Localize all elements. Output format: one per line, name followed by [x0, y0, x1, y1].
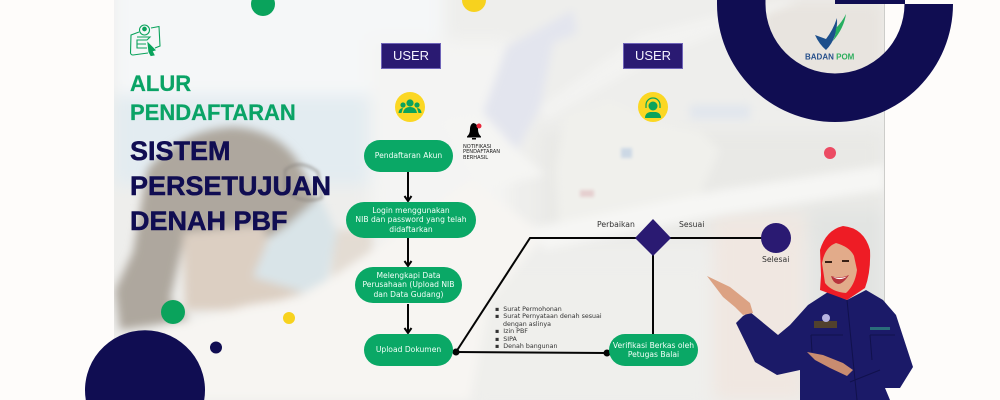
photo: background band	[330, 228, 374, 276]
heading: sistem persetujuan denah pbf: DENAH PBF	[130, 206, 288, 236]
notification text	[463, 144, 500, 160]
large navy ring	[717, 0, 953, 122]
document list: ▪ SIPA	[495, 336, 517, 343]
heading: alur pendaftaran	[130, 71, 296, 125]
document list: ▪ Izin PBF	[495, 328, 528, 335]
document list: dengan aslinya	[503, 321, 551, 328]
photo: mask	[253, 197, 337, 292]
step: melengkapi data: Melengkapi Data	[376, 271, 441, 280]
yellow small dot	[283, 312, 295, 324]
presenter upper hand	[707, 276, 753, 315]
step: verifikasi berkas	[609, 334, 698, 366]
photo: diagonal highlight	[766, 4, 781, 12]
step: login: Login menggunakan	[372, 206, 450, 215]
document list: ▪ Surat Permohonan	[495, 306, 562, 313]
presenter eyes and smile	[825, 260, 849, 263]
heading: sistem persetujuan denah pbf	[130, 136, 331, 236]
presenter uniform body and sleeves	[736, 290, 913, 400]
user label right: USER	[635, 48, 671, 63]
presenter chest logo	[870, 327, 890, 330]
step: login	[346, 202, 476, 238]
photo: hair	[115, 127, 320, 330]
photo: skin	[183, 225, 303, 310]
label sesuai: Sesuai	[679, 220, 704, 229]
navy small dot	[210, 342, 222, 354]
photo: glove	[485, 18, 572, 143]
heading: sistem persetujuan denah pbf: SISTEM	[130, 136, 231, 166]
photo: lab coat sleeve	[440, 113, 545, 190]
step: melengkapi data	[355, 267, 462, 303]
step: pendaftaran akun	[364, 140, 453, 172]
user label left	[381, 43, 441, 69]
user label right	[623, 43, 683, 69]
label perbaikan: Perbaikan	[597, 220, 635, 229]
notification text: BERHASIL	[463, 154, 488, 160]
top yellow dot	[462, 0, 486, 12]
notification text: NOTIFIKASI	[463, 144, 491, 150]
user label left: USER	[393, 48, 429, 63]
photo: bottles	[555, 100, 720, 240]
heading: alur pendaftaran: PENDAFTARAN	[130, 100, 296, 125]
blurred photo background	[114, 0, 885, 400]
presenter name badge	[814, 321, 837, 328]
step: verifikasi berkas: Verifikasi Berkas oleh	[613, 341, 694, 350]
navy big circle bottom left	[85, 330, 205, 400]
heading: sistem persetujuan denah pbf: PERSETUJUAN	[130, 170, 331, 200]
document list	[495, 306, 602, 350]
document list: ▪ Surat Pernyataan denah sesuai	[495, 313, 602, 320]
step: melengkapi data: dan Data Gudang)	[373, 290, 444, 299]
step: upload dokumen	[364, 334, 453, 366]
step: upload dokumen: Upload Dokumen	[376, 345, 441, 354]
top green dot	[251, 0, 275, 16]
green dot lower left	[161, 300, 185, 324]
step: pendaftaran akun: Pendaftaran Akun	[375, 151, 442, 160]
step: login: NIB dan password yang telah	[355, 215, 467, 224]
photo: shelf	[542, 168, 883, 244]
step: verifikasi berkas: Petugas Balai	[628, 350, 679, 359]
photo: blue bar	[692, 106, 748, 118]
label selesai: Selesai	[762, 255, 789, 264]
photo: bottle labels	[621, 148, 632, 158]
presenter face	[822, 243, 857, 293]
presenter hijab	[820, 226, 870, 300]
presenter lower hand	[807, 352, 853, 376]
logo: badan pom: BADAN POM	[805, 52, 855, 62]
document list: ▪ Denah bangunan	[495, 343, 558, 350]
step: login: didaftarkan	[389, 225, 433, 234]
heading: alur pendaftaran: ALUR	[130, 71, 191, 96]
step: melengkapi data: Perusahaan (Upload NIB	[362, 280, 454, 289]
notification text: PENDAFTARAN	[463, 149, 500, 155]
photo: coat	[164, 225, 533, 395]
pink dot	[824, 147, 836, 159]
